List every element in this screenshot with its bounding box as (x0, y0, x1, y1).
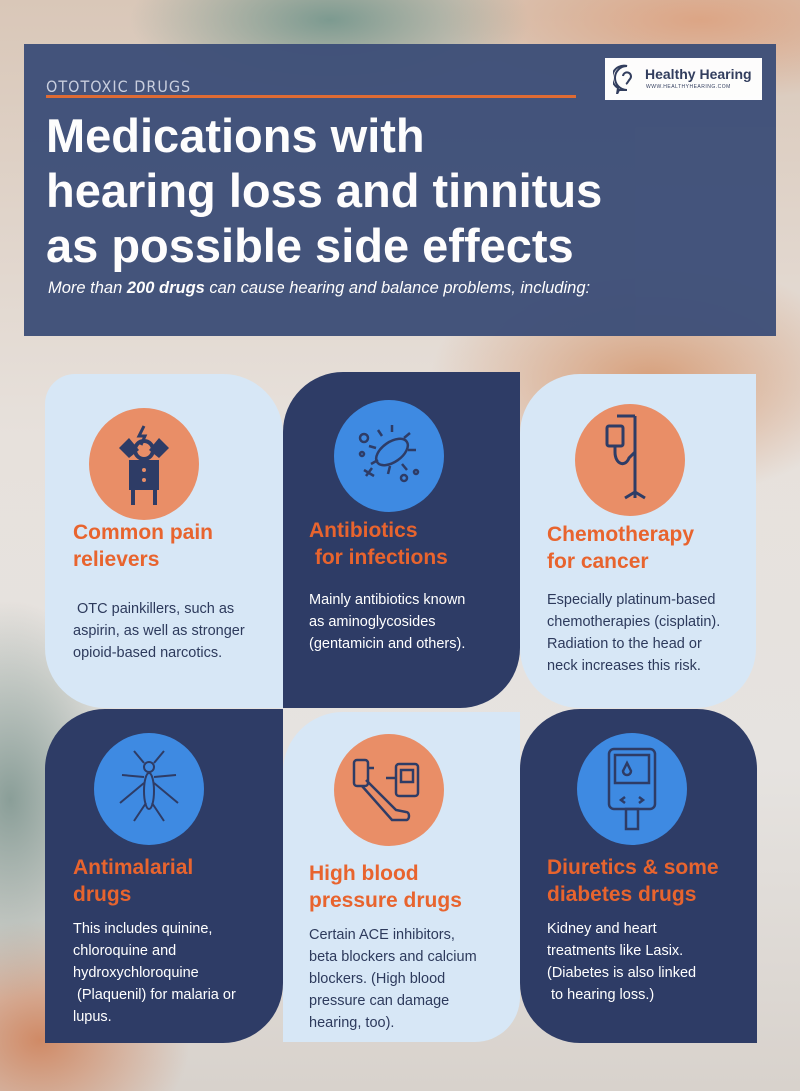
title: hearing loss and tinnitus (46, 164, 602, 217)
panel: antibiotics: Mainly antibiotics known (309, 592, 465, 608)
logo: WWW.HEALTHYHEARING.COM (646, 84, 731, 90)
panel: high blood pressure: Certain ACE inhibitors, (309, 927, 455, 943)
panel: diuretics: Kidney and heart (547, 921, 657, 937)
icon: BP monitor (334, 734, 444, 846)
panel: chemotherapy (520, 374, 756, 708)
panel: common pain relievers: opioid-based narcotics. (73, 645, 222, 661)
panel: antimalarial: This includes quinine, (73, 921, 212, 937)
panel: antimalarial: drugs (73, 883, 131, 906)
icon: glucose meter (577, 733, 687, 845)
panel: high blood pressure: pressure can damage (309, 993, 449, 1009)
panel: antibiotics: as aminoglycosides (309, 614, 436, 630)
panel: diuretics: (Diabetes is also linked (547, 965, 696, 981)
title: as possible side effects (46, 219, 574, 272)
panel: common pain relievers: aspirin, as well as stronger (73, 623, 245, 639)
orange rule (46, 95, 576, 98)
panel: diuretics: treatments like Lasix. (547, 943, 683, 959)
icon: mosquito (94, 733, 204, 845)
panel: antibiotics (283, 372, 520, 708)
panel: antimalarial: chloroquine and (73, 943, 176, 959)
panel: high blood pressure: blockers. (High blood (309, 971, 445, 987)
panel: chemotherapy: Radiation to the head or (547, 636, 702, 652)
panel: diuretics: diabetes drugs (547, 883, 696, 906)
panel: antibiotics: for infections (315, 546, 448, 569)
logo (605, 58, 762, 100)
panel: common pain relievers: Common pain (73, 521, 213, 544)
logo: Healthy Hearing (645, 66, 752, 82)
panel: antibiotics: Antibiotics (309, 519, 418, 542)
panel: high blood pressure: beta blockers and calcium (309, 949, 477, 965)
icon: stressed person (89, 408, 199, 520)
panel: antimalarial: (Plaquenil) for malaria or (77, 987, 236, 1003)
panel: diuretics: Diuretics & some (547, 856, 719, 879)
panel: common pain relievers: OTC painkillers, such as (77, 601, 234, 617)
icon: IV drip (575, 404, 685, 516)
panel: chemotherapy: chemotherapies (cisplatin). (547, 614, 720, 630)
panel: antimalarial (45, 709, 283, 1043)
panel: chemotherapy: neck increases this risk. (547, 658, 701, 674)
panel: antimalarial: lupus. (73, 1009, 112, 1025)
panel: high blood pressure (283, 712, 520, 1042)
panel: diuretics: to hearing loss.) (551, 987, 654, 1003)
icon: bacteria (334, 400, 444, 512)
panel: chemotherapy: for cancer (547, 550, 649, 573)
panel: chemotherapy: Especially platinum-based (547, 592, 715, 608)
subtitle: More than 200 drugs can cause hearing and balance problems, including: (48, 279, 590, 297)
panel: antibiotics: (gentamicin and others). (309, 636, 465, 652)
title (46, 109, 602, 272)
title: Medications with (46, 109, 425, 162)
panel: high blood pressure: hearing, too). (309, 1015, 394, 1031)
panel: diuretics (520, 709, 757, 1043)
header panel (24, 44, 776, 336)
panel: common pain relievers (45, 374, 283, 708)
panel: chemotherapy: Chemotherapy (547, 523, 694, 546)
panel: antimalarial: hydroxychloroquine (73, 965, 199, 981)
panel: high blood pressure: High blood (309, 862, 419, 885)
kicker: ototoxic drugs: OTOTOXIC DRUGS (46, 77, 191, 96)
panel: antimalarial: Antimalarial (73, 856, 193, 879)
panel: common pain relievers: relievers (73, 548, 159, 571)
icon: ear bubble (613, 64, 632, 94)
panel: high blood pressure: pressure drugs (309, 889, 462, 912)
